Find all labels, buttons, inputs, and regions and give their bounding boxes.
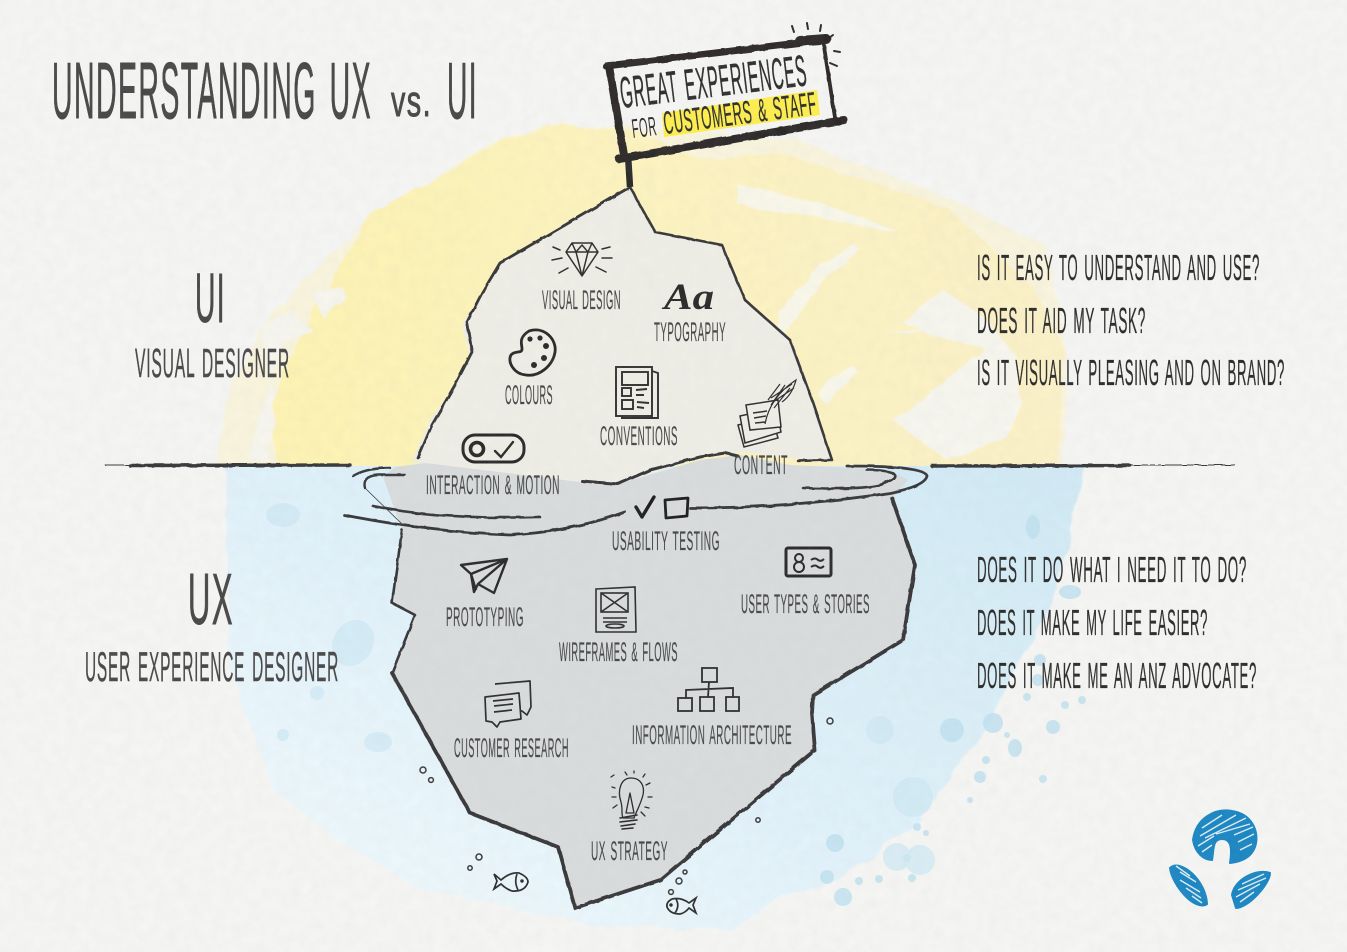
water ripples [344,466,927,535]
item: colours [505,330,555,410]
iceberg below water [383,455,915,908]
icon: Aa: Aa [662,277,714,318]
infographic canvas: USABILITY TESTING [612,526,720,556]
item: user types and stories [741,548,870,619]
item: conventions [600,367,678,451]
infographic canvas: USER TYPES & STORIES [741,589,870,619]
icon: diamond [552,243,612,276]
UI questions [977,247,1285,393]
infographic canvas: INFORMATION ARCHITECTURE [632,720,792,750]
infographic canvas: GREAT EXPERIENCES [617,46,810,118]
infographic canvas: CUSTOMER RESEARCH [454,733,569,763]
flag text: FOR [630,111,659,144]
title [52,46,478,135]
logo right leaf [1232,872,1270,908]
infographic canvas: UNDERSTANDING UX [52,46,372,135]
icon: toggle [463,435,524,462]
icon: papers and quill [738,380,796,447]
item: prototyping [446,559,524,632]
infographic canvas: WIREFRAMES & FLOWS [559,637,678,667]
icon: wireframe [596,587,636,632]
flag pole [628,155,630,187]
infographic canvas: UI [447,46,478,135]
flag [606,23,844,187]
UI heading: UI [195,259,226,337]
water splashes [820,515,1086,906]
infographic canvas: CONVENTIONS [600,421,678,451]
UX questions [977,549,1257,696]
fish right [667,898,696,914]
infographic canvas: PROTOTYPING [446,602,524,632]
infographic canvas: VISUAL DESIGNER [135,340,290,386]
flag frame [606,39,844,159]
fish left [494,873,528,891]
UX heading: UX [188,560,234,640]
infographic canvas: UX STRATEGY [591,836,668,866]
flag text [617,46,819,144]
bubbles [420,718,833,894]
sparkle [792,23,840,66]
icon: light bulb [611,771,652,829]
title: vs. [391,77,432,126]
infographic canvas: COLOURS [505,380,553,410]
item: typography [654,277,726,347]
item: usability testing [612,497,720,556]
infographic canvas: VISUAL DESIGN [542,285,621,315]
icon: paper plane [461,559,507,593]
item: content [734,380,796,480]
logo left leaf [1170,866,1207,905]
infographic canvas: INTERACTION & MOTION [426,470,560,500]
logo arch [1193,810,1256,863]
iceberg above water [412,187,832,482]
UX heading [85,560,339,690]
item: interaction and motion [426,435,560,500]
infographic canvas: CONTENT [734,450,788,480]
iceberg outline [392,187,915,908]
infographic canvas: TYPOGRAPHY [654,317,726,347]
icon: document layout [616,367,658,418]
icon: speech bubbles [485,681,531,727]
infographic canvas: USER EXPERIENCE DESIGNER [85,643,339,690]
UI heading [135,259,290,386]
infographic canvas: CUSTOMERS & STAFF [661,85,819,141]
icon: palette [510,330,555,375]
item: customer research [454,681,569,763]
logo [1170,810,1270,908]
water line [105,465,1235,466]
icon: check and box [636,497,688,518]
icon: sitemap [678,668,739,711]
item: ux strategy [591,771,668,866]
icon: profile card [786,548,831,576]
watercolour water [225,450,1087,930]
item: information architecture [632,668,792,750]
faint water washes [266,503,935,875]
item: wireframes and flows [559,587,678,667]
item: visual design [542,243,621,315]
highlighter [662,90,820,137]
watercolour sun [217,124,1067,480]
